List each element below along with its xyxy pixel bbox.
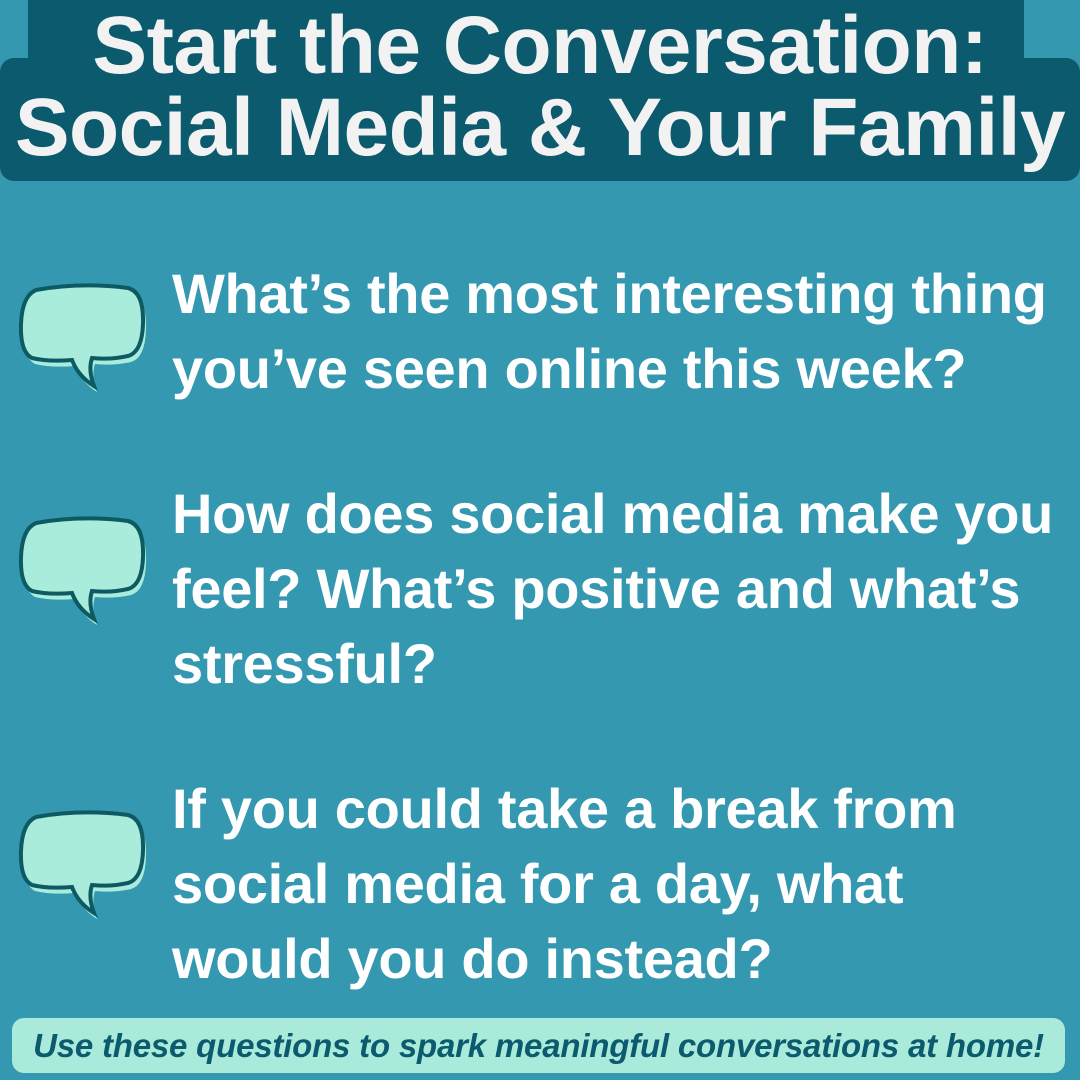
icon: speech bubble 2	[18, 516, 146, 625]
question 1	[172, 262, 1047, 400]
title: Social Media & Your Family	[15, 82, 1065, 173]
question 3: would you do instead?	[172, 927, 772, 990]
header band	[0, 0, 1080, 181]
question 1: What’s the most interesting thing	[172, 262, 1047, 325]
icon: speech bubble 3	[18, 810, 146, 919]
question 3: social media for a day, what	[172, 852, 903, 915]
footer callout	[12, 1018, 1065, 1073]
title	[15, 0, 1066, 173]
icon: speech bubble 1	[18, 283, 146, 392]
question 2: stressful?	[172, 632, 437, 695]
question 2	[172, 482, 1053, 695]
title: Start the Conversation:	[92, 0, 988, 91]
question 1: you’ve seen online this week?	[172, 337, 966, 400]
question 2: How does social media make you	[172, 482, 1053, 545]
footer callout: Use these questions to spark meaningful conversations at home!	[33, 1027, 1044, 1064]
question 2: feel? What’s positive and what’s	[172, 557, 1020, 620]
question 3: If you could take a break from	[172, 777, 957, 840]
question 3	[172, 777, 957, 990]
